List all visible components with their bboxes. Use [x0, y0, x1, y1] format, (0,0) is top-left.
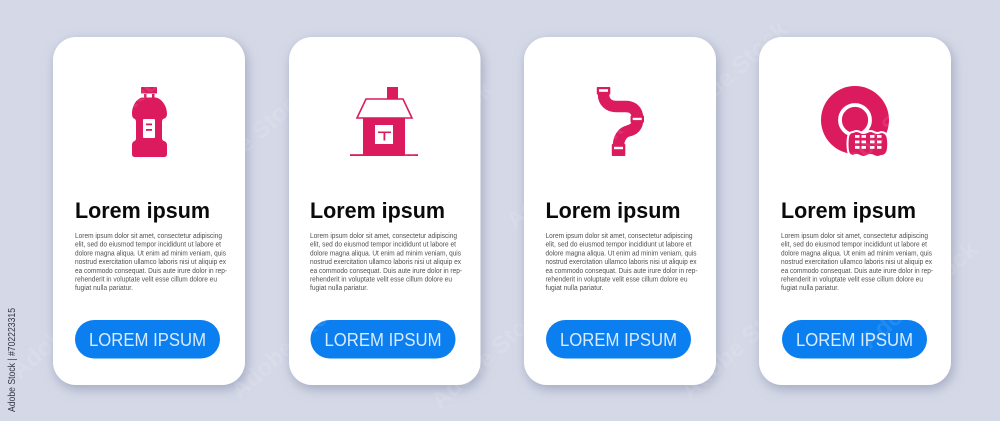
- button: [782, 320, 927, 358]
- button: LOREM IPSUM: [89, 329, 206, 350]
- button: [546, 320, 691, 358]
- text block: elit, sed do eiusmod tempor incididunt ut labore et: [781, 242, 927, 249]
- text block: Lorem ipsum dolor sit amet, consectetur adipiscing: [546, 233, 693, 240]
- icon: house: [350, 87, 418, 156]
- text block: dolore magna aliqua. Ut enim ad minim veniam, quis: [781, 250, 932, 257]
- text block: elit, sed do eiusmod tempor incididunt ut labore et: [310, 242, 456, 249]
- text block: ea commodo consequat. Duis aute irure dolor in rep-: [75, 268, 228, 275]
- card 2: house: [289, 37, 480, 385]
- icon: bottle: [132, 87, 167, 157]
- text block: Lorem ipsum dolor sit amet, consectetur adipiscing: [781, 233, 928, 240]
- text block: rehenderit in voluptate velit esse cillum dolore eu: [781, 276, 923, 284]
- watermark: Adobe Stock: [226, 286, 354, 404]
- text block: dolore magna aliqua. Ut enim ad minim veniam, quis: [546, 250, 697, 257]
- button: [75, 320, 220, 358]
- heading: Lorem ipsum: [546, 198, 680, 223]
- text block: elit, sed do eiusmod tempor incididunt ut labore et: [546, 242, 692, 249]
- text block: [310, 233, 463, 292]
- text block: fugiat nulla pariatur.: [310, 285, 368, 292]
- text block: nostrud exercitation ullamco laboris nisi ut aliquip ex: [781, 259, 932, 266]
- button: LOREM IPSUM: [324, 329, 442, 350]
- stock id label: Adobe Stock | #702223315: [7, 308, 18, 412]
- watermark: Adobe Stock: [371, 76, 499, 194]
- text block: fugiat nulla pariatur.: [75, 285, 133, 292]
- card 4: plate and sponge: [759, 37, 951, 385]
- text block: ea commodo consequat. Duis aute irure dolor in rep-: [781, 268, 934, 275]
- text block: ea commodo consequat. Duis aute irure dolor in rep-: [546, 268, 698, 275]
- heading: Lorem ipsum: [310, 198, 445, 223]
- card 1: bottle: [53, 37, 245, 385]
- watermark: Adobe Stock: [856, 236, 984, 354]
- text block: nostrud exercitation ullamco laboris nisi ut aliquip ex: [75, 259, 226, 266]
- text block: ea commodo consequat. Duis aute irure dolor in rep-: [310, 268, 463, 275]
- text block: dolore magna aliqua. Ut enim ad minim veniam, quis: [310, 250, 461, 257]
- text block: Lorem ipsum dolor sit amet, consectetur adipiscing: [310, 233, 457, 240]
- text block: [546, 233, 698, 292]
- text block: [781, 233, 934, 292]
- text block: dolore magna aliqua. Ut enim ad minim veniam, quis: [75, 250, 226, 257]
- text block: fugiat nulla pariatur.: [546, 285, 604, 292]
- icon: plate and sponge: [821, 86, 889, 157]
- text block: elit, sed do eiusmod tempor incididunt ut labore et: [75, 242, 221, 249]
- watermark: Adobe Stock: [816, 76, 944, 194]
- watermark: Adobe Stock: [426, 296, 554, 414]
- text block: nostrud exercitation ullamco laboris nisi ut aliquip ex: [546, 259, 697, 266]
- icon: pipe: [597, 87, 644, 156]
- watermark: Adobe Stock: [46, 61, 174, 179]
- text block: [75, 233, 228, 292]
- button: LOREM IPSUM: [560, 329, 677, 350]
- text block: rehenderit in voluptate velit esse cillum dolore eu: [546, 276, 688, 284]
- watermark: Adobe Stock: [501, 116, 629, 234]
- text block: rehenderit in voluptate velit esse cillum dolore eu: [75, 276, 217, 284]
- text block: rehenderit in voluptate velit esse cillum dolore eu: [310, 276, 452, 284]
- watermark: Adobe Stock: [6, 266, 134, 384]
- text block: fugiat nulla pariatur.: [781, 285, 839, 292]
- text block: Lorem ipsum dolor sit amet, consectetur adipiscing: [75, 233, 222, 240]
- button: LOREM IPSUM: [796, 329, 913, 350]
- heading: Lorem ipsum: [75, 198, 210, 223]
- watermark: Adobe Stock: [676, 286, 804, 404]
- watermark: Adobe Stock: [666, 16, 794, 134]
- card 3: pipe: [524, 37, 716, 385]
- watermark: Adobe Stock: [186, 81, 314, 199]
- text block: nostrud exercitation ullamco laboris nisi ut aliquip ex: [310, 259, 461, 266]
- heading: Lorem ipsum: [781, 198, 916, 223]
- button: [310, 320, 456, 358]
